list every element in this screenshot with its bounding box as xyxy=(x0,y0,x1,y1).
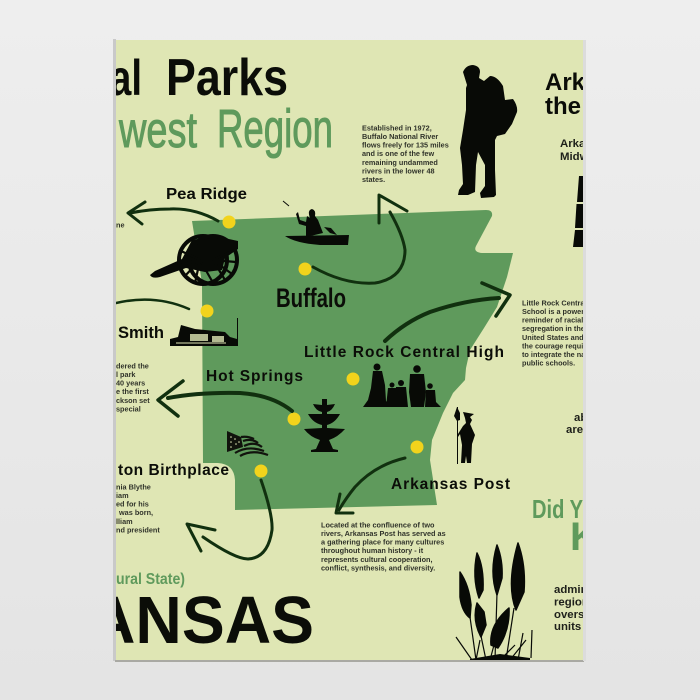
text block: Little Rock Central High xyxy=(522,298,587,368)
text fragment: Clinton Birthplace: ed for his xyxy=(116,500,149,509)
arrow: Little Rock Central High xyxy=(385,283,510,341)
poster mockup xyxy=(113,39,586,662)
text block: Arkansas Midwest xyxy=(560,139,583,160)
text fragment: Pea Ridge: ne xyxy=(116,220,125,230)
label: Pea Ridge: Pea Ridge xyxy=(166,186,247,203)
text block: Arkansas Post: rivers, Arkansas Post has served as xyxy=(321,529,446,538)
text fragment: Fort Smith: ckson set xyxy=(116,396,150,405)
icon: kayaker xyxy=(283,201,349,245)
text block: Little Rock Central High: United States and xyxy=(522,333,584,342)
text fragment: right side xyxy=(566,413,583,433)
text fragment: right side: ab xyxy=(574,412,587,424)
text block: did you know xyxy=(554,584,591,633)
text block: Little Rock Central High: the courage requir xyxy=(522,341,586,350)
heading: Did You Know: Did Y xyxy=(532,494,583,524)
text fragment: Fort Smith: l park xyxy=(116,370,136,379)
icon: cannon xyxy=(150,236,238,284)
text fragment: Fort Smith: 40 years xyxy=(116,379,145,388)
heading: Arkansas the: Ark xyxy=(545,69,586,96)
label: Arkansas Post: Arkansas Post xyxy=(391,476,510,493)
text fragment: Fort Smith: e the first xyxy=(116,387,149,396)
text block: Buffalo National River: Established in 1972, xyxy=(362,124,432,132)
arrow: Buffalo xyxy=(313,195,407,283)
text fragment: Clinton Birthplace: nia Blythe xyxy=(116,482,151,492)
text fragment: Fort Smith: dered the xyxy=(116,362,149,370)
text block: Little Rock Central High: Little Rock Centra xyxy=(522,298,585,308)
subtitle: west Region xyxy=(118,108,331,158)
text block: did you know: region xyxy=(554,596,589,608)
label: Hot Springs: Hot Springs xyxy=(206,368,303,385)
icon: family silhouettes xyxy=(363,364,441,407)
arrow: Hot Springs xyxy=(158,381,292,416)
label: Buffalo: Buffalo xyxy=(276,283,346,313)
icon: American flag xyxy=(227,431,268,456)
text block: Arkansas Post: throughout human history - it xyxy=(321,546,424,555)
heading: Arkansas the: the xyxy=(545,93,581,120)
label: Clinton Birthplace: ton Birthplace xyxy=(118,462,229,479)
icon: pampas grass xyxy=(456,543,532,660)
text block: Arkansas Post: conflict, synthesis, and diversity. xyxy=(321,563,435,572)
icon: soldier with halberd xyxy=(454,407,475,464)
text block: Arkansas Post: a gathering place for many cultures xyxy=(321,538,444,547)
text block: Arkansas Midwest: Arka xyxy=(560,138,586,150)
text block: Buffalo National River: rivers in the lower 48 xyxy=(362,166,435,175)
title: al Parks xyxy=(116,58,286,96)
heading: Did You Know: K xyxy=(570,515,599,559)
heading: Arkansas, the Natural State: ural State) xyxy=(116,571,185,588)
text block: Arkansas Post: Located at the confluence of two xyxy=(321,520,435,530)
label: Little Rock Central High: Little Rock Central High xyxy=(304,344,504,361)
text block: Little Rock Central High: to integrate the na xyxy=(522,350,586,359)
arrow: Clinton Birthplace xyxy=(187,480,272,559)
text fragment: Clinton Birthplace xyxy=(116,482,160,534)
text block: Buffalo National River: Buffalo National River xyxy=(362,132,438,141)
text block: Buffalo National River: and is one of the few xyxy=(362,149,434,158)
text block: Little Rock Central High: segregation in the xyxy=(522,324,585,333)
text block: Little Rock Central High: reminder of racial xyxy=(522,316,583,325)
text block: Arkansas Post xyxy=(321,520,446,572)
text fragment: Clinton Birthplace: lliam xyxy=(116,517,133,526)
text fragment: Clinton Birthplace: nd president xyxy=(116,525,160,534)
heading: ARKANSAS: ANSAS xyxy=(89,583,314,658)
title: al Parks: Parks xyxy=(166,49,288,107)
text block: did you know: oversi xyxy=(554,609,588,621)
icon: Fort Smith building xyxy=(170,318,238,346)
heading: Did You Know xyxy=(533,499,583,550)
text block: Arkansas Midwest: Midw xyxy=(560,151,589,163)
icon: hiker silhouette xyxy=(458,65,517,198)
text block: did you know: units v xyxy=(554,621,591,633)
text block: Little Rock Central High: School is a powerf xyxy=(522,307,587,316)
poster background xyxy=(116,40,583,660)
label: Fort Smith: Smith xyxy=(118,323,164,342)
arrow: Arkansas Post xyxy=(336,458,405,513)
arrow: Fort Smith xyxy=(116,300,189,309)
subtitle: west Region: Region xyxy=(217,99,333,159)
text block: Buffalo National River: states. xyxy=(362,175,385,184)
text fragment: Clinton Birthplace: was born, xyxy=(118,508,153,517)
text block: Buffalo National River: remaining undammed xyxy=(362,158,438,167)
text block: Buffalo National River xyxy=(362,124,449,184)
text fragment: Fort Smith: special xyxy=(116,404,141,413)
text block: Little Rock Central High: public schools. xyxy=(522,359,575,368)
icon: monument segments xyxy=(573,176,583,247)
subtitle: west Region: west xyxy=(118,102,197,158)
text fragment: Fort Smith xyxy=(116,362,150,413)
title: al Parks: al xyxy=(110,50,142,106)
text fragment: Clinton Birthplace: iam xyxy=(116,491,129,500)
text block: Arkansas Post: represents cultural cooperation, xyxy=(321,555,433,564)
map of Arkansas xyxy=(192,210,513,510)
text block: Buffalo National River: flows freely for 135 miles xyxy=(362,141,449,150)
text block: did you know: admin xyxy=(554,584,588,596)
text fragment: right side: are xyxy=(566,424,583,436)
icon: fountain xyxy=(304,399,345,452)
location marker dots xyxy=(200,216,424,478)
heading: Arkansas the xyxy=(545,72,583,114)
arrow: Pea Ridge xyxy=(128,202,218,224)
